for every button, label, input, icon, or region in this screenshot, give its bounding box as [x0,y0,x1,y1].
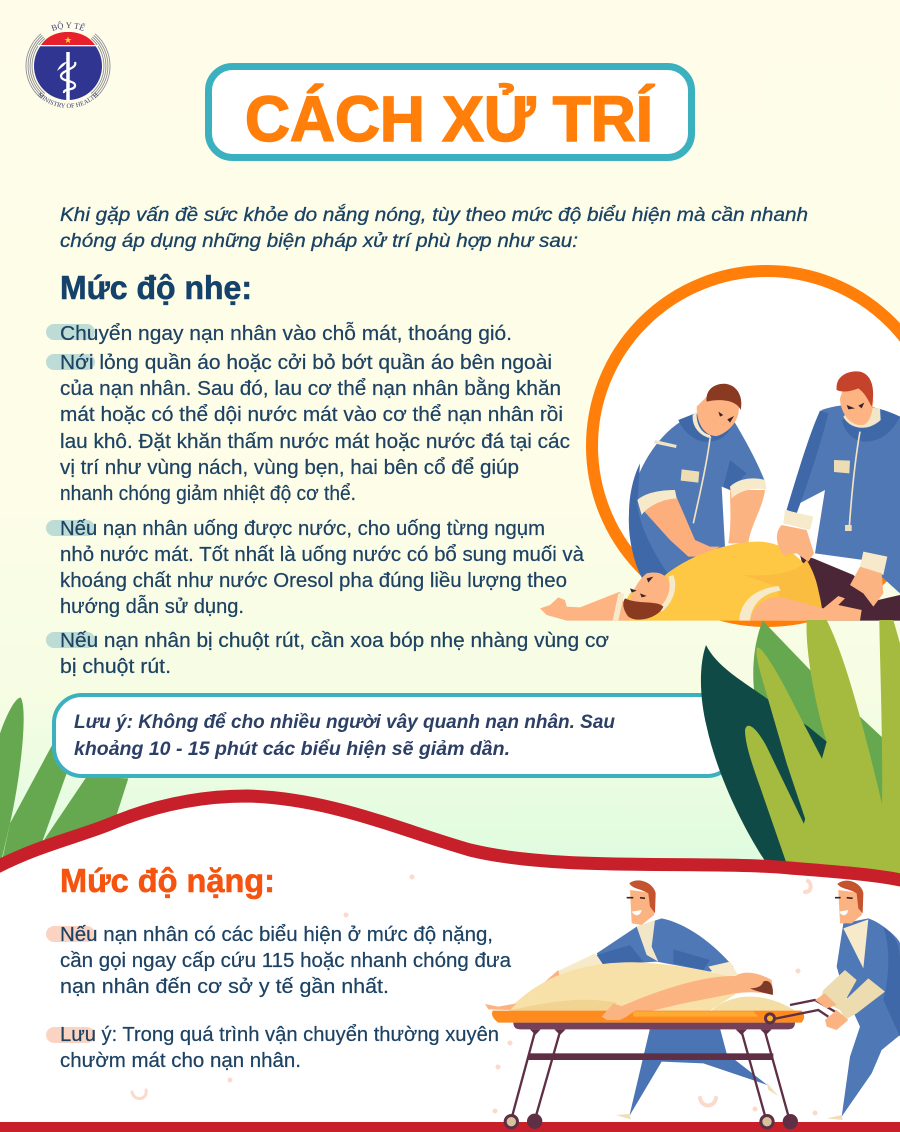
bottom red bar [0,1122,900,1132]
logo: Ministry of Health: MINISTRY OF HEALTH [38,92,98,108]
callout: note: khoảng 10 - 15 phút các biểu hiện sẽ giảm dần. [74,739,510,760]
severe level bullet list: chườm mát cho nạn nhân. [60,1050,301,1072]
mild level bullet list: của nạn nhân. Sau đó, lau cơ thể nạn nhân bằng khăn [60,377,561,400]
mild level bullet list: nhanh chóng giảm nhiệt độ cơ thể. [60,483,356,505]
mild level bullet list [46,322,609,678]
mild level bullet list: bị chuột rút. [60,656,171,678]
red wave stroke [0,796,900,881]
severe level bullet list [46,924,512,1072]
callout: note [54,695,735,776]
mild level bullet list: Chuyển ngay nạn nhân vào chỗ mát, thoáng gió. [60,322,512,345]
heading: mild level: Mức độ nhẹ: [60,269,252,306]
leaves right [701,620,900,877]
mild level bullet list: Nếu nạn nhân bị chuột rút, cần xoa bóp nhẹ nhàng vùng cơ [60,630,609,652]
severe level bullet list: Lưu ý: Trong quá trình vận chuyển thường xuyên [60,1024,499,1046]
mild level bullet list: nhỏ nước mát. Tốt nhất là uống nước có bổ sung muối và [60,544,585,566]
intro text [60,203,808,252]
mild level bullet list: lau khô. Đặt khăn thấm nước mát hoặc nước đá tại các [60,431,570,453]
white lower section [0,796,900,1132]
title box: CÁCH XỬ TRÍ [245,82,655,155]
intro text: Khi gặp vấn đề sức khỏe do nắng nóng, tùy theo mức độ biểu hiện mà cần nhanh [60,203,808,226]
logo: Ministry of Health [26,21,110,108]
intro text: chóng áp dụng những biện pháp xử trí phù hợp như sau: [60,230,578,252]
mild level bullet list: Nếu nạn nhân uống được nước, cho uống từng ngụm [60,518,545,540]
logo: Ministry of Health: BỘ Y TẾ [50,21,86,31]
mild level bullet list: Nới lỏng quần áo hoặc cởi bỏ bớt quần áo bên ngoài [60,352,552,374]
mild level bullet list: vị trí như vùng nách, vùng bẹn, hai bên cổ để giúp [60,457,519,479]
heading: severe level: Mức độ nặng: [60,862,275,899]
illustration: medics treating patient in orange circle [540,271,900,621]
severe level bullet list: Nếu nạn nhân có các biểu hiện ở mức độ nặng, [60,924,493,946]
logo: Ministry of Health: ★ [64,35,72,45]
illustration: medics pushing stretcher [485,880,900,1129]
severe level bullet list: cần gọi ngay cấp cứu 115 hoặc nhanh chóng đưa [60,950,512,972]
mild level bullet list: hướng dẫn sử dụng. [60,595,244,618]
leaves left [0,697,128,870]
mild level bullet list: mát hoặc có thể dội nước mát vào cơ thể nạn nhân rồi [60,404,563,426]
title box [208,66,692,158]
decorative dots [132,874,818,1116]
severe level bullet list: nạn nhân đến cơ sở y tế gần nhất. [60,976,389,998]
mild level bullet list: khoáng chất như nước Oresol pha đúng liều lượng theo [60,570,567,592]
callout: note: Lưu ý: Không để cho nhiều người vây quanh nạn nhân. Sau [74,712,615,733]
